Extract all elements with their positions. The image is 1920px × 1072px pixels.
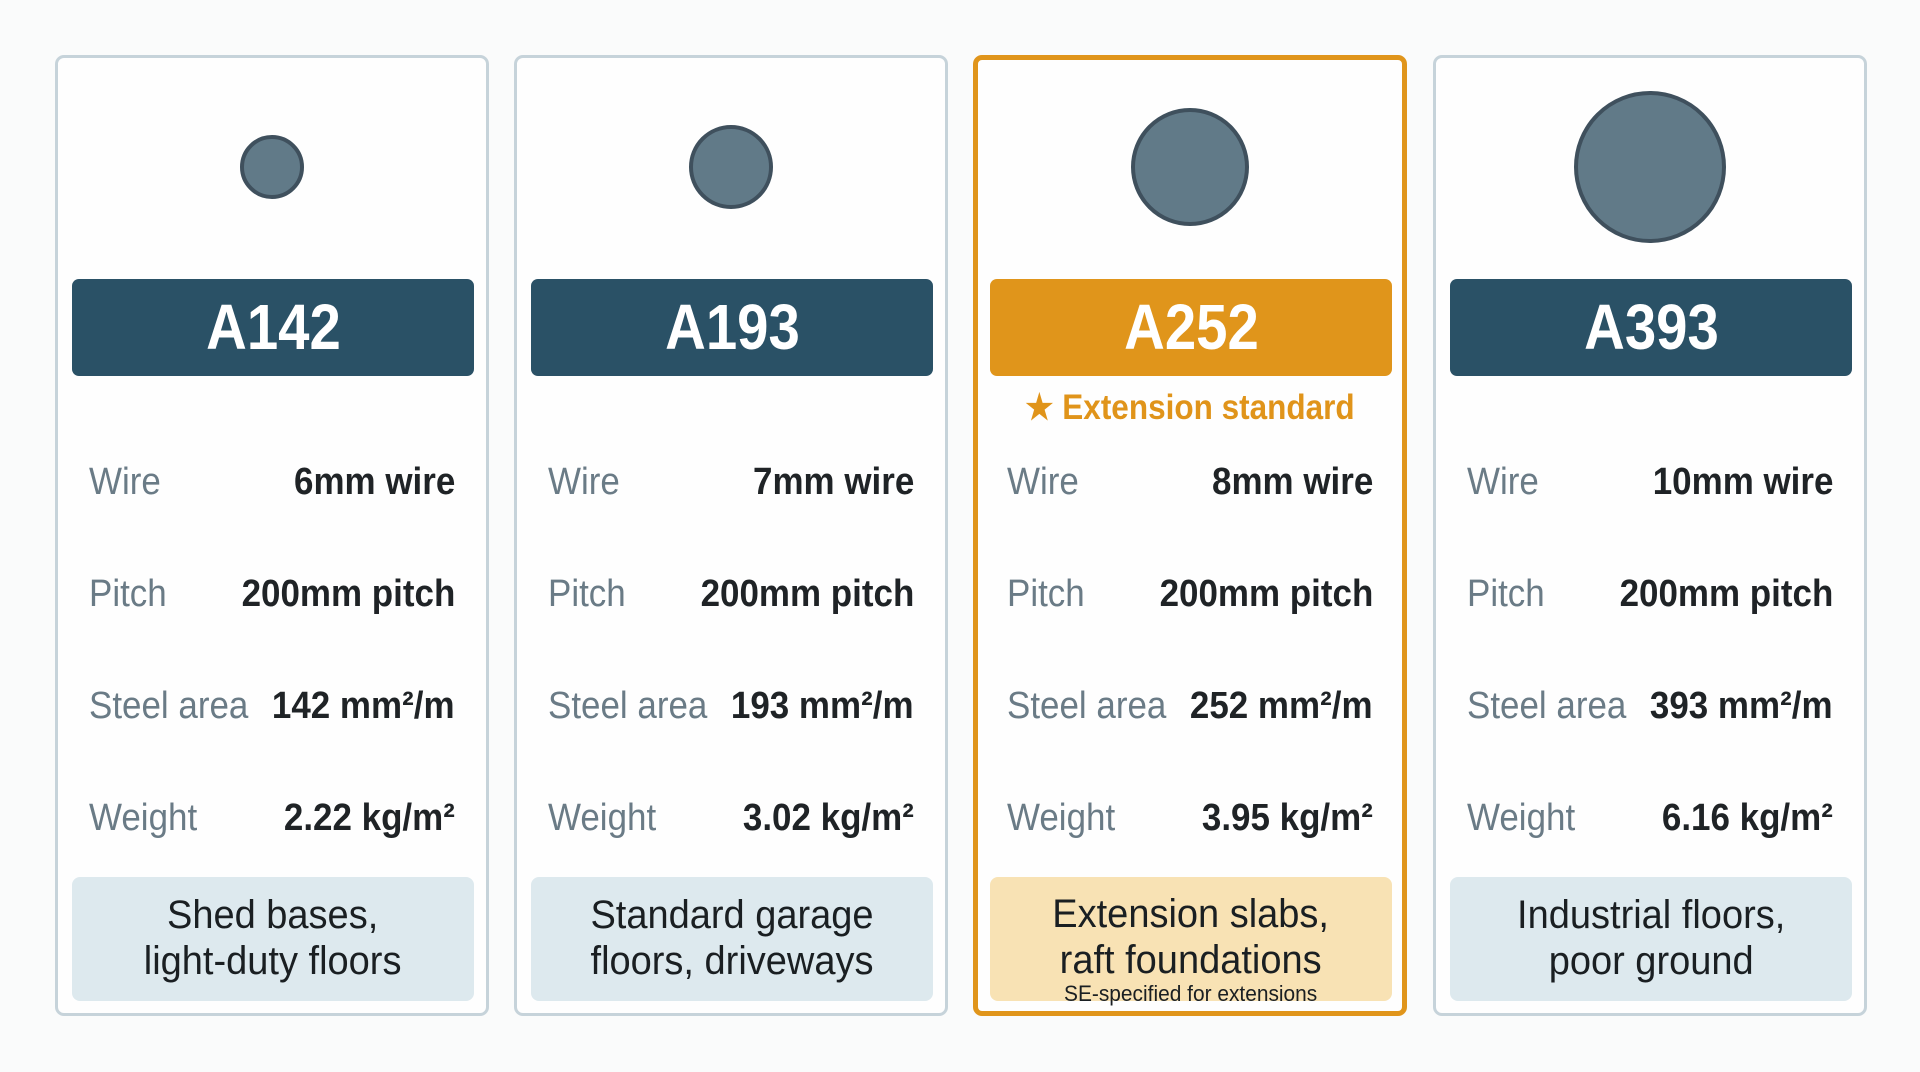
- badge: extension standard: ★ Extension standard: [1025, 388, 1355, 427]
- row: wire: 7mm wire: [753, 461, 914, 503]
- panel: A193: [514, 55, 948, 1016]
- row: wire: 8mm wire: [1212, 461, 1373, 503]
- row: weight: 2.22 kg/m²: [284, 797, 455, 839]
- row: steel area: 252 mm²/m: [1190, 685, 1373, 727]
- heading: A393: [1450, 279, 1852, 376]
- row: wire: [548, 461, 914, 503]
- row: steel area: [1467, 685, 1833, 727]
- heading: A193: [531, 279, 933, 376]
- row: pitch: 200mm pitch: [1159, 573, 1373, 615]
- row: steel area: Steel area: [1007, 685, 1166, 727]
- row: weight: Weight: [548, 797, 656, 839]
- row: wire: Wire: [1007, 461, 1079, 503]
- text block: use: Shed bases,: [167, 893, 379, 937]
- row: pitch: 200mm pitch: [241, 573, 455, 615]
- row: weight: Weight: [89, 797, 197, 839]
- row: weight: [1007, 797, 1373, 839]
- text block: use: Extension slabs,: [1053, 892, 1329, 936]
- heading: A393: A393: [1584, 291, 1718, 363]
- row: wire: Wire: [89, 461, 161, 503]
- row: steel area: 393 mm²/m: [1650, 685, 1833, 727]
- row: wire: 6mm wire: [294, 461, 455, 503]
- row: pitch: [548, 573, 914, 615]
- row: steel area: 142 mm²/m: [272, 685, 455, 727]
- row: weight: [548, 797, 914, 839]
- heading: A252: A252: [1124, 291, 1258, 363]
- heading: A142: [72, 279, 474, 376]
- row: steel area: Steel area: [89, 685, 248, 727]
- row: steel area: [1007, 685, 1373, 727]
- text block: use: [72, 877, 474, 1001]
- text block: use: [1450, 877, 1852, 1001]
- text block: use: SE-specified for extensions: [1064, 981, 1318, 1006]
- row: weight: 6.16 kg/m²: [1662, 797, 1833, 839]
- panel: A252 highlighted: [973, 55, 1407, 1016]
- heading: A193: A193: [665, 291, 799, 363]
- row: steel area: [548, 685, 914, 727]
- panel: A393: [1433, 55, 1867, 1016]
- row: pitch: Pitch: [1007, 573, 1085, 615]
- text block: use: [990, 877, 1392, 1001]
- icon: wire cross-section 8mm: [1131, 108, 1249, 226]
- row: pitch: Pitch: [1467, 573, 1545, 615]
- heading: A142: A142: [206, 291, 340, 363]
- row: weight: Weight: [1467, 797, 1575, 839]
- row: pitch: [1467, 573, 1833, 615]
- icon: wire cross-section 7mm: [689, 125, 773, 209]
- row: weight: 3.02 kg/m²: [743, 797, 914, 839]
- text block: use: Industrial floors,: [1517, 893, 1785, 937]
- row: wire: Wire: [548, 461, 620, 503]
- row: pitch: Pitch: [89, 573, 167, 615]
- row: steel area: 193 mm²/m: [731, 685, 914, 727]
- row: wire: 10mm wire: [1652, 461, 1833, 503]
- row: weight: Weight: [1007, 797, 1115, 839]
- row: steel area: Steel area: [1467, 685, 1626, 727]
- row: pitch: [89, 573, 455, 615]
- row: pitch: 200mm pitch: [1619, 573, 1833, 615]
- row: wire: Wire: [1467, 461, 1539, 503]
- row: wire: [1467, 461, 1833, 503]
- row: pitch: 200mm pitch: [700, 573, 914, 615]
- row: pitch: [1007, 573, 1373, 615]
- text block: use: Standard garage: [590, 893, 874, 937]
- panel: A142: [55, 55, 489, 1016]
- text block: use: [531, 877, 933, 1001]
- row: wire: [1007, 461, 1373, 503]
- row: weight: 3.95 kg/m²: [1202, 797, 1373, 839]
- row: weight: [1467, 797, 1833, 839]
- text block: use: poor ground: [1549, 939, 1753, 983]
- text block: use: raft foundations: [1060, 938, 1322, 982]
- row: steel area: [89, 685, 455, 727]
- heading: A252: [990, 279, 1392, 376]
- row: pitch: Pitch: [548, 573, 626, 615]
- row: weight: [89, 797, 455, 839]
- text block: use: light-duty floors: [144, 939, 402, 983]
- text block: use: floors, driveways: [590, 939, 873, 983]
- icon: wire cross-section 10mm: [1574, 91, 1726, 243]
- icon: wire cross-section 6mm: [240, 135, 304, 199]
- row: wire: [89, 461, 455, 503]
- row: steel area: Steel area: [548, 685, 707, 727]
